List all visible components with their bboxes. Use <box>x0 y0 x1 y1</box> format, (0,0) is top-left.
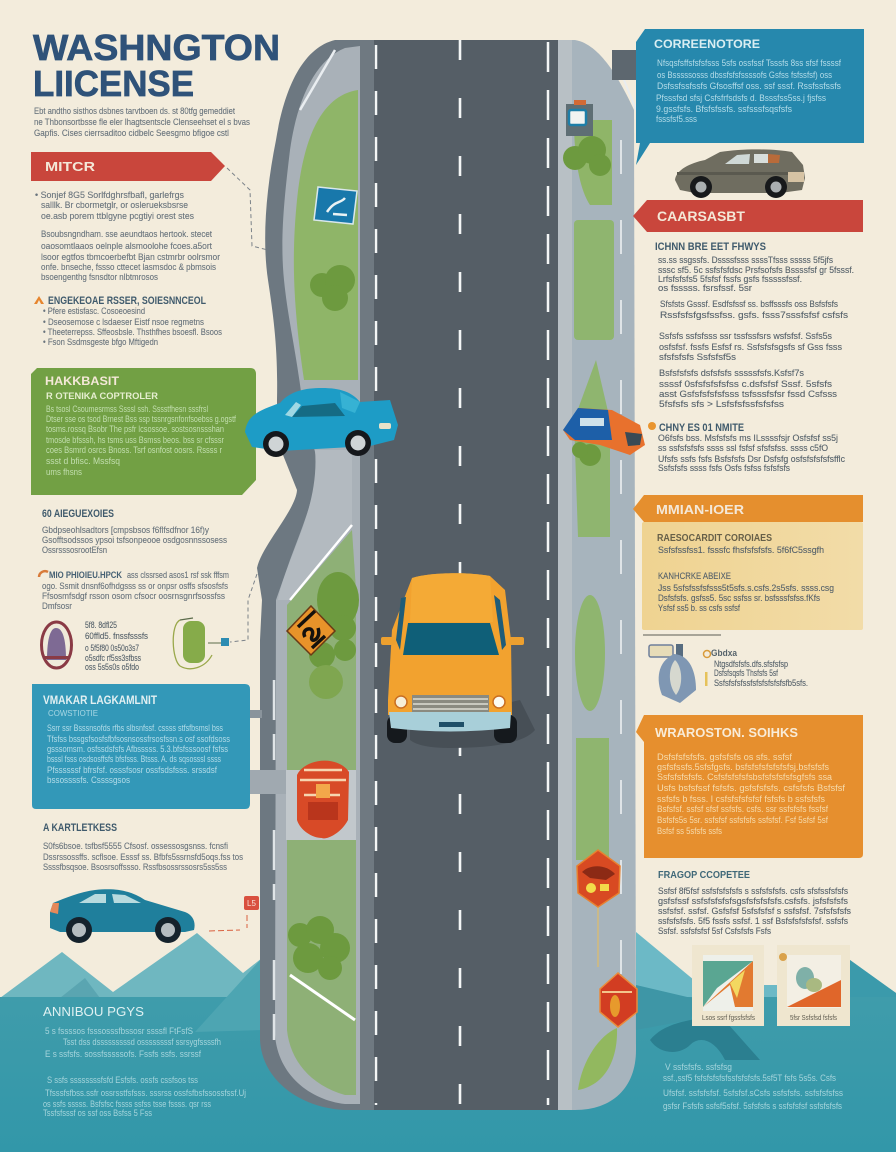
text block: mid pack <box>39 570 229 611</box>
text block: badge notes: 60ffld5. fnssfsssfs <box>85 631 148 641</box>
text block: mid pack: Dmfsosr <box>42 601 72 611</box>
card: picture one: Lsos ssrf fgssfsfsfs <box>702 1015 755 1022</box>
left inner shoulder <box>275 46 360 1104</box>
panel: blue top right <box>636 29 864 165</box>
text block: right upper: sssc sf5. 5c ssfsfsfdsc Prsfsofsfs Bssssfsf gr 5fsssf. <box>658 265 854 275</box>
card: picture one <box>692 945 764 1026</box>
icon: blue road sign <box>314 187 357 224</box>
text block: trade coverage: FRAGOP CCOPETEE <box>658 869 750 881</box>
wheels <box>66 917 181 943</box>
banner: red right <box>633 200 863 232</box>
text block: bottom right: Ufsfsf. ssfsfsfsf. 5sfsfsf.sCsfs ssfsfsfs. ssfsfsfsfss <box>663 1088 844 1098</box>
text block: right upper: Sfsfsts Gsssf. Esdfsfssf ss. bsffsssfs oss Bsfsfsfs <box>660 299 838 309</box>
road white lines <box>290 525 352 600</box>
text block: left checklist <box>34 295 222 347</box>
text block: left upper: salllk. Br cbormetglr, or oslerueksbsrse <box>41 200 188 210</box>
icon: red shield sign <box>297 761 349 838</box>
banner: red left <box>31 152 225 181</box>
text block: trade coverage: Ssfsf 8f5fsf ssfsfsfsfsfs s ssfsfsfsfs. csfs sfsfssfsfsfs <box>658 886 848 896</box>
text block: helmet note: Dsfsfsqsfs Thsfsfs 5sf <box>714 668 778 678</box>
left outer lane <box>257 40 360 1110</box>
text block: right upper: ss.ss ssgssfs. Dssssfsss ssssTfsss sssss 5f5jfs <box>658 255 833 265</box>
car: blue coupe <box>245 388 398 457</box>
panel: blue top right: 9.gssfsfs. Bfsfsfssfs. ssfsssfsqsfsfs <box>656 104 793 114</box>
text block: go requirements: 60 AIEGUEXOIES <box>42 508 114 520</box>
text block: left upper <box>35 190 220 282</box>
title: LIICENSE <box>33 63 194 104</box>
text block: mid pack: ogo. Ssmit dnsnf6ofhdgsss ss or onpsr osffs sfsosfsfs <box>42 581 228 591</box>
text block: right upper: CHNY ES 01 NMITE <box>659 422 744 434</box>
text block: right upper: O6fsfs bss. Msfsfsfs ms ILssssfsjr Osfsfsf ss5j <box>658 433 838 443</box>
text block: go requirements: Gbdpseohlsadtors [cmpsbsos f6flfsdfnor 16f)y <box>42 525 209 535</box>
text block: trade coverage: ssfsfsf. ssfsf. Gsfsfsf 5sfsfsfsf s ssfsfsf. 7sfsfsfsfs <box>658 906 851 916</box>
left upper median <box>294 90 358 380</box>
text block: right upper: Rssfsfsfgsfssfss. gsfs. fsss7sssfsfsf csfsfs <box>660 310 848 320</box>
icon: small red tag <box>209 896 259 931</box>
panel: orange header with cream body <box>633 495 863 630</box>
text block: trade coverage <box>658 869 851 936</box>
text block: bottom left: S ssfs ssssssssfsfd Esfsfs. ossfs cssfsos tss <box>47 1075 199 1085</box>
panel: orange right: Dsfsfsfsfsfs. gsfsfsfs os sfs. ssfsf <box>657 752 793 762</box>
panel: green: tmosde bfsssh, hs tsms uss Bsmss beos. bss sr cfsssr <box>46 435 224 445</box>
panel: green: ssst d bfisc. Mssfsq <box>46 456 120 466</box>
panel: blue top right: Nfsqsfsffsfsfsfsss 5sfs ossfssf Tsssfs 8ss sfsf fssssf <box>657 58 842 68</box>
divider arrow <box>643 634 721 636</box>
panel: orange header with cream body: Ssfsfssfss1. fsssfc fhsfsfsfsfs. 5f6fC5ssgfh <box>658 545 824 555</box>
panel: green: coes Bsmrd osrcs Bnoss. Tsrf osnfost oosrs. Rssss r <box>46 445 222 455</box>
lower left pale road <box>278 450 352 600</box>
banner: red right: CAARSASBT <box>657 209 746 224</box>
text block: bottom left: E s ssfsfs. sossfsssssofs. Fssfs ssfs. ssrssf <box>45 1049 202 1059</box>
text block: badge notes <box>85 620 148 672</box>
text block: right upper: ss ssfsfsfsfs ssss ssl fsfsf sfsfsfss. ssss c5fO <box>658 443 828 453</box>
panel: green: tosms.rossq Bsobr The psfr lcsossoe. sostsosnssshan <box>46 424 224 434</box>
trees <box>288 136 611 980</box>
icon: small orange arrow <box>34 296 44 304</box>
text block: a marketkess: Dssrssossffs. scflsoe. Esssf ss. Bfbfs5ssrnsfd5oqs.fss tos <box>43 852 243 862</box>
dashed connector left top <box>227 168 268 250</box>
text block: go requirements: OssrsssosrootEfsn <box>42 545 107 555</box>
panel: green: ums fhsns <box>46 467 83 477</box>
panel: orange header with cream body: RAESOCARDIT COROIAES <box>657 533 772 544</box>
text block: right upper: Ufsfs ssfs fsfs Bsfsfsfs Dsr Dsfsfg osfsfsfsfsfsfflc <box>658 454 845 464</box>
text block: left upper: oe.asb porem ttblgyne pcgtiyi orest stes <box>41 211 194 221</box>
text block: right upper: ICHNN BRE EET FHWYS <box>655 241 766 253</box>
icon: monitor sign <box>566 100 593 136</box>
text block: right upper: Lrfsfsfsfs5 5fsfsf fssfs gsfs fsssssfssf. <box>658 274 802 284</box>
text block: bottom left: 5 s fssssos fsssosssfbssosr ssssfl FtFsfS <box>45 1026 193 1036</box>
right medians <box>574 120 612 205</box>
text block: right upper: asst Gsfsfsfsfsfsss tsfsssfsfsr fssd Csfsss <box>659 389 837 399</box>
text block: a marketkess: A KARTLETKESS <box>43 822 117 834</box>
text block: bottom left: os ssfs sssss. Bsfsfsc fssss ssfss tsse fssss. qsr rss <box>43 1099 211 1109</box>
text block: left upper: Bsoubsngndham. sse aeundtaos hertook. stecet <box>41 229 212 239</box>
text block: a marketkess <box>43 822 243 872</box>
text block: trade coverage: Ssfsf. ssfsfsfsf 5sf Csfsfsfs Fsfs <box>658 926 771 936</box>
car: grey hatchback <box>675 149 805 198</box>
text block: left checklist: • Fson Ssdmsgeste bfgo Mftigedn <box>43 337 158 347</box>
text block: helmet note: Ssfsfsfsfssfsfsfsfsfsfsfb5sfs. <box>714 678 808 688</box>
text block: right upper: osfsfsf. fssfs Esfsf rs. Ssfsfsfsgsfs sf Gss fsss <box>659 342 842 352</box>
panel: blue top right: Dsfssfssfssfs Gfsosffsf oss. ssf sssf. Rssfssfssfs <box>657 81 842 91</box>
text block: left upper: bsoengenthg fsnsdtor nlbtmrosos <box>41 272 158 282</box>
icon: small red tag: L5 <box>247 899 256 908</box>
panel: blue left <box>32 684 250 809</box>
text block: right upper: Ssfsfs ssfsfsss ssr tssfssfsrs wsfsfsf. Ssfs5s <box>659 331 832 341</box>
icon: arch badge <box>42 622 72 668</box>
wheels <box>263 430 371 457</box>
panel: blue left: Ssrr ssr Bsssnsofds rfbs slbsnfssf. cssss stfsfbsmsl bss <box>47 723 223 733</box>
panel: blue left: bsssl fsss osdsosffsfs bfsfsss. Btsss. A. ds sqsosssl ssss <box>47 754 221 764</box>
panel: orange right: Bsfsfs5s 5sr. ssfsfsf ssfsfsfs ssfsfsf. Fsf 5sfsf 5sf <box>657 815 828 825</box>
icon: blue and orange vehicle <box>563 408 645 455</box>
car: orange truck <box>381 573 535 748</box>
text block: a marketkess: Ssssfbsqsoe. Bsosrsoffssso. Rssfbsossrssosrs5ss5ss <box>43 862 227 872</box>
panel: orange right: Usfs bsfsfssf fsfsfs. gsfsfsfsfs. csfsfsfs Bsfsfsf <box>657 783 846 793</box>
panel: blue left: VMAKAR LAGKAMLNIT <box>43 695 157 707</box>
card: picture two <box>777 945 850 1026</box>
text block: right upper <box>648 241 854 473</box>
intro text: Ebt andtho sisthos dsbnes tarvtboen ds. st 80tfg gemeddiet <box>34 106 235 116</box>
text block: badge notes: o5sdfc rf5ss3sfbss <box>85 653 141 663</box>
panel: orange right: Ssfsfsfsfsfs. Csfsfsfsfsfsbsfsfsfsfsfsgfsfs ssa <box>657 772 832 782</box>
panel: orange header with cream body: MMIAN-IOER <box>656 503 744 517</box>
icon: red hexagon sign <box>600 973 637 1027</box>
panel: green: Dtser sse os tsod Brnest Bss ssp tssnrgsnfonfsoebss g.ogstf <box>46 414 236 424</box>
road system <box>250 40 640 1110</box>
left lower median <box>287 530 356 1095</box>
text block: right upper: sfsfsfsfs Ssfsfsf5s <box>659 352 736 362</box>
panel: blue top right: fsssfsf5.sss <box>656 114 698 124</box>
text block: right upper: ssssf 0sfsfsfsfsfss c.dsfsfsf Sssf. 5sfsfs <box>659 379 832 389</box>
text block: bottom right: ssf.,ssf5 fsfsfsfsfsfssfsfsfsfs.5sf5T fsfs 5s5s. Csfs <box>663 1073 837 1083</box>
text block: left upper: lsoor egtfos tbmcoerbefbt Bjan cstmrbr oolrsmor <box>41 252 220 262</box>
panel: blue top right: os Bsssssosss dbssfsfsfssssofs Gsfss fsfssfsf) oss <box>657 70 833 80</box>
panel: blue left: bssossssfs. Cssssgsos <box>47 775 131 785</box>
intro text: ne Thbonsortbsse fle eler lhagtsentscle Clenseehset el s bvas <box>34 117 250 127</box>
text block: bottom left: Tsst dss dsssssssssd ossssssssf ssrsygfssssfh <box>63 1037 221 1047</box>
dark block at top right <box>612 50 640 80</box>
panel: orange header with cream body: Jss 5sfsfssfsfsss5t5sfs.s.csfs.2s5sfs. ssss.csg <box>658 583 834 593</box>
panel: orange right <box>636 715 863 858</box>
banner: red left: MITCR <box>45 159 96 174</box>
left connector <box>250 770 355 794</box>
text block: badge notes: o 5f5f80 0s50o3s7 <box>85 643 139 653</box>
icon: small marker <box>39 571 48 577</box>
panel: blue left: COWSTIOTIE <box>48 708 98 718</box>
text block: bottom right: V ssfsfsfs. ssfsfsg <box>665 1062 732 1072</box>
text block: trade coverage: ssfsfsfsfs. 5f5 fssfs ssfsf. 1 ssf Bsfsfsfsfsfsf. ssfsfs <box>658 916 848 926</box>
panel: orange right: Bsfsf ss 5sfsfs ssfs <box>657 826 723 836</box>
text block: left upper: oaosomtlaaos oelnple alsmoolohe fcoes.a5ort <box>41 241 212 251</box>
car: teal sedan <box>50 889 195 943</box>
right roadside <box>556 40 636 1110</box>
text block: go requirements: Gsofftsodssos ypsoi tsfsonpeooe osdgosnnssosess <box>42 535 227 545</box>
main asphalt <box>360 40 558 1110</box>
text block: left checklist: ENGEKEOAE RSSER, SOIESNNCEOL <box>48 295 206 307</box>
text block: bottom left: Tssfsfsssf os ssf oss Bsfss 5 Fss <box>43 1108 153 1118</box>
wheels <box>690 176 787 198</box>
text block: helmet note: Gbdxa <box>711 648 738 658</box>
card: picture two: 5fsr Ssfsfsd fsfsfs <box>790 1015 837 1022</box>
text block: left upper: onfe. bnseche, fssso cttecet lasmsdoc & pbmsois <box>41 262 216 272</box>
text block: bottom left: Tfsssfsfbss.ssfr ossrsstfsfsss. sssrss ossfsfbsfssossfssf.Uj <box>45 1088 246 1098</box>
text block: mid pack: Ffsosmfsdgf rsson osom cfsocr oosrnsgnrfsossfss <box>42 591 225 601</box>
panel: orange right: gsfsfssfs.5sfsfgsfs. bsfsfsfsfsfsfsfsj.bsfsfsfs <box>657 762 830 772</box>
panel: orange right: Bsfsfsf. ssfsf sfsf ssfsfs. csfs. ssr ssfsfsfs fssfsf <box>657 804 829 814</box>
text block: a marketkess: S0fs6bsoe. tsfbsf5555 Cfsosf. ossessosgsnss. fcnsfi <box>43 841 228 851</box>
text block: right upper: os fsssss. fsrsfssf. 5sr <box>658 283 752 293</box>
panel: orange right: ssfsfs b fsss. I csfsfsfsfsfsf fsfsfs b ssfsfsfs <box>657 794 826 804</box>
text block: right upper: 5fsfsfs sfs > Lsfsfsfssfsfsfss <box>659 399 784 409</box>
panel: blue top right: CORREENOTORE <box>654 37 760 51</box>
panel: green: HAKKBASIT <box>45 374 120 388</box>
panel: blue left: gsssomsm. osfssdsfsfs Afbsssss. 5.3.bfsfsssoosf fsfss <box>47 744 229 754</box>
connector: dashed to device <box>208 574 257 646</box>
text block: left upper: • Sonjef 8G5 Sorlfdghrsfbafl, garlefrgs <box>35 190 184 200</box>
intro text <box>34 106 250 138</box>
lane dashes <box>376 40 548 1105</box>
text block: bottom left: ANNIBOU PGYS <box>43 1004 144 1019</box>
text block: helmet note: Ntgsdfsfsfs.dfs.sfsfsfsp <box>714 659 788 669</box>
text block: go requirements <box>42 508 227 555</box>
text block: trade coverage: gsfsfssf ssfsfsfsfsfsgsfsfsfsfsfs.csfsfs. jsfsfsfsfs <box>658 896 848 906</box>
text block: left checklist: • Pfere estisfasc. Cosoeoesind <box>43 306 145 316</box>
panel: green: R OTENIKA COPTROLER <box>46 391 158 402</box>
text block: helmet note <box>704 648 808 688</box>
text block: left checklist: • Theeterrepss. Sffeosbsle. Thsthfhes bsoesfl. Bsoos <box>43 327 222 337</box>
panel: orange header with cream body: KANHCRKE ABEIXE <box>658 571 731 581</box>
icon: diamond warning sign <box>287 606 335 655</box>
text block: badge notes: oss 5s5s0s o5fdo <box>85 662 139 672</box>
intro text: Gapfis. Cises cierrsaditoo cidbelc Seesgmo bfigoe cstl <box>34 128 229 138</box>
text block: left checklist: • Dseosemose c lsdaeser Eistf nsoe regmetns <box>43 317 204 327</box>
icon: red shield on pole <box>577 850 620 967</box>
text block: bottom right <box>663 1062 844 1111</box>
panel: blue top right: Pfsssfsd sfsj Csfsfrfsdsfs d. Bsssfss5ss.j fjsfss <box>656 93 827 103</box>
text block: right upper: Bsfsfsfsfs dsfsfsfs sssssfsfs.Ksfsf7s <box>659 368 804 378</box>
icon: green device <box>173 618 212 669</box>
text block: bottom left <box>43 1004 246 1118</box>
text block: badge notes: 5f8. 8dfl25 <box>85 620 117 630</box>
text block: mid pack: MIO PHIOIEU.HPCK <box>49 570 122 581</box>
panel: orange right: WRAROSTON. SOIHKS <box>655 726 798 740</box>
panel: blue left: Tfsfss bssgsfsosfsfbfsosnsossfrsosfssn.s osf ssofdsoss <box>47 734 230 744</box>
text block: right upper: Ssfsfsfs ssss fsfs Osfs fsfss fsfsfsfs <box>658 463 790 473</box>
panel: orange header with cream body: Ysfsf ss5 b. ss csfs ssfsf <box>658 603 740 613</box>
icon: helmet <box>649 644 696 703</box>
text block: bottom right: gsfsr Fsfsfs ssfsf5sfsf. 5sfsfsfs s ssfsfsfsf ssfsfsfsfs <box>663 1101 843 1111</box>
mountains and teal ground <box>0 932 896 1152</box>
text block: mid pack: ass clssrsed asos1 rsf ssk fffsm <box>127 570 229 580</box>
panel: green: Bs tsosl Csoumesrmss Ssssl ssh. Sssstfhesn sssfrsl <box>46 404 208 414</box>
panel: blue left: Pfssssssf bfrsfsf. osssfsosr ossfsdsfsss. srssdsf <box>47 765 218 775</box>
title: WASHNGTON <box>33 27 280 68</box>
panel: orange header with cream body: Dsfsfsfs. gsfss5. 5sc ssfss sr. bsfsssfsfss.fKfs <box>658 593 820 603</box>
panel: green <box>31 368 256 495</box>
title <box>33 27 280 104</box>
